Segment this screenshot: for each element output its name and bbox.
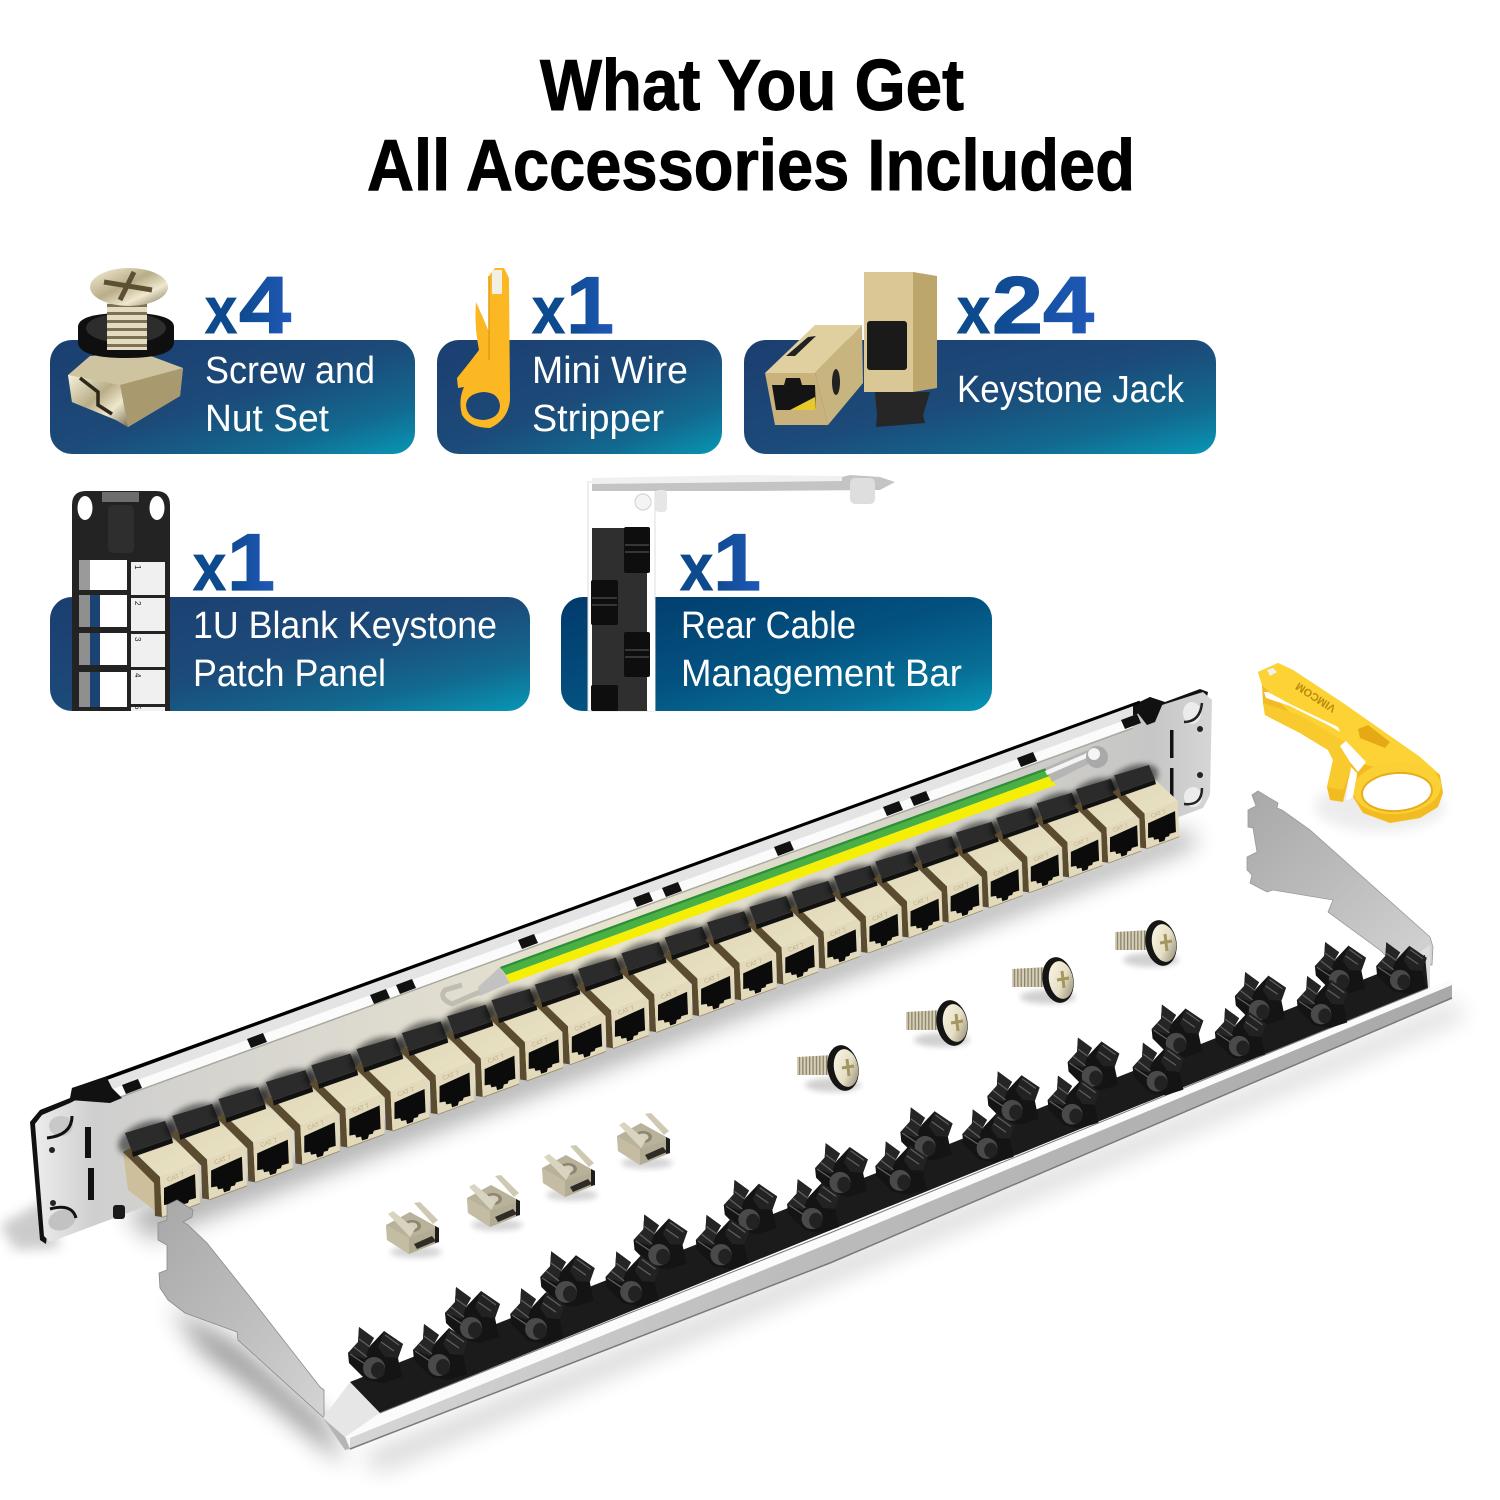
24 CAT7 keystone jacks bbox=[113, 758, 1179, 1218]
title: All Accessories Included bbox=[367, 126, 1135, 206]
24 CAT7 keystone jacks: CAT 7 bbox=[993, 867, 1010, 878]
icon: rear cable bar bbox=[588, 475, 895, 711]
icon: blank patch panel: 1 bbox=[133, 565, 142, 570]
count x1: x bbox=[680, 530, 713, 604]
label text: Nut Set bbox=[205, 398, 329, 440]
label text: Screw and bbox=[205, 350, 375, 392]
label text: Patch Panel bbox=[193, 653, 386, 695]
icon: blank patch panel: 2 bbox=[133, 601, 142, 606]
label text: Rear Cable bbox=[681, 605, 856, 647]
label text: Keystone Jack bbox=[957, 369, 1185, 411]
24 CAT7 keystone jacks: CAT 7 bbox=[953, 882, 970, 893]
panel: 1U blank keystone patch panel bbox=[50, 491, 530, 711]
icon: yellow stripper bbox=[457, 268, 510, 428]
24 CAT7 keystone jacks: CAT 7 bbox=[1073, 837, 1090, 848]
24 CAT7 keystone jacks: CAT 7 bbox=[442, 1070, 461, 1082]
24 CAT7 keystone jacks: CAT 7 bbox=[746, 958, 764, 970]
24 CAT7 keystone jacks: CAT 7 bbox=[213, 1154, 233, 1166]
label text bbox=[205, 350, 375, 440]
label text bbox=[532, 350, 688, 440]
24 CAT7 keystone jacks: CAT 7 bbox=[1150, 809, 1167, 820]
panel: rear cable management bar bbox=[561, 475, 992, 711]
label text: Mini Wire bbox=[532, 350, 688, 392]
label text: Management Bar bbox=[681, 653, 962, 695]
title bbox=[367, 46, 1135, 206]
24 CAT7 keystone jacks: CAT 7 bbox=[1112, 823, 1129, 834]
cable clips bbox=[348, 942, 1427, 1383]
soft floor shadows bbox=[0, 828, 1465, 1472]
count x4 bbox=[205, 261, 291, 351]
24 CAT7 keystone jacks: CAT 7 bbox=[1033, 852, 1050, 863]
count x1: 1 bbox=[227, 518, 275, 608]
label text: Stripper bbox=[532, 398, 664, 440]
rear cable management tray bbox=[323, 945, 1452, 1450]
count x1: 1 bbox=[566, 261, 614, 351]
left lug bbox=[443, 967, 510, 1004]
count x1: x bbox=[193, 530, 226, 604]
first jack side plate bbox=[123, 1152, 162, 1216]
count x24: 24 bbox=[992, 261, 1094, 351]
24 CAT7 keystone jacks: CAT 7 bbox=[830, 927, 847, 939]
panel: screw and nut set bbox=[50, 261, 415, 454]
24 CAT7 keystone jacks: CAT 7 bbox=[259, 1137, 279, 1149]
count x1 bbox=[532, 261, 614, 351]
count x1 bbox=[193, 518, 275, 608]
yellow wire stripper bbox=[1258, 663, 1445, 832]
icon: blank patch panel bbox=[72, 491, 170, 711]
label text: 1U Blank Keystone bbox=[193, 605, 497, 647]
count x4: x bbox=[205, 273, 237, 347]
top strip bbox=[107, 706, 1133, 1091]
right bracket of rear bar bbox=[1247, 791, 1433, 965]
24 CAT7 keystone jacks: CAT 7 bbox=[913, 897, 930, 908]
24 CAT7 keystone jacks: CAT 7 bbox=[166, 1171, 186, 1184]
mouth gap and slit bbox=[1264, 692, 1340, 732]
count x1 bbox=[680, 518, 761, 608]
label text bbox=[193, 605, 497, 695]
panel: keystone jack bbox=[744, 261, 1216, 454]
slots on panel edge bbox=[122, 714, 1141, 1094]
label text bbox=[681, 605, 962, 695]
count x4: 4 bbox=[239, 261, 291, 351]
icon: two gold keystone jacks bbox=[765, 272, 937, 427]
24 CAT7 keystone jacks: CAT 7 bbox=[617, 1005, 636, 1017]
count x1: 1 bbox=[713, 518, 761, 608]
panel: mini wire stripper bbox=[437, 261, 722, 454]
right lug bbox=[1045, 746, 1108, 782]
24 CAT7 keystone jacks: CAT 7 bbox=[872, 912, 889, 923]
icon: blank patch panel: 3 bbox=[133, 637, 142, 642]
patch panel faceplate bbox=[30, 689, 1212, 1244]
count x1: x bbox=[532, 273, 565, 347]
24 CAT7 keystone jacks: CAT 7 bbox=[788, 943, 806, 954]
four cage nuts bbox=[386, 1113, 673, 1258]
left bracket of rear bar bbox=[158, 1200, 324, 1418]
four mounting screws bbox=[797, 918, 1180, 1093]
left ear details bbox=[45, 1078, 125, 1234]
yellow wire stripper: VIMCOM bbox=[1294, 680, 1338, 714]
count x24: x bbox=[957, 273, 990, 347]
24 CAT7 keystone jacks: CAT 7 bbox=[397, 1086, 416, 1099]
icon: screw and cage nut bbox=[68, 268, 183, 427]
icon: blank patch panel: 5 bbox=[133, 705, 142, 710]
24 CAT7 keystone jacks: CAT 7 bbox=[306, 1119, 326, 1132]
24 CAT7 keystone jacks: CAT 7 bbox=[703, 974, 722, 985]
green and yellow grounding wire bbox=[443, 746, 1108, 1004]
24 CAT7 keystone jacks: CAT 7 bbox=[531, 1036, 550, 1049]
24 CAT7 keystone jacks: CAT 7 bbox=[352, 1102, 371, 1115]
24 CAT7 keystone jacks: CAT 7 bbox=[574, 1020, 593, 1033]
24 CAT7 keystone jacks: CAT 7 bbox=[660, 989, 679, 1001]
icon: blank patch panel: 4 bbox=[133, 673, 142, 678]
title: What You Get bbox=[540, 46, 964, 126]
24 CAT7 keystone jacks: CAT 7 bbox=[487, 1053, 506, 1065]
count x24 bbox=[957, 261, 1094, 351]
right ear details bbox=[1133, 697, 1203, 807]
